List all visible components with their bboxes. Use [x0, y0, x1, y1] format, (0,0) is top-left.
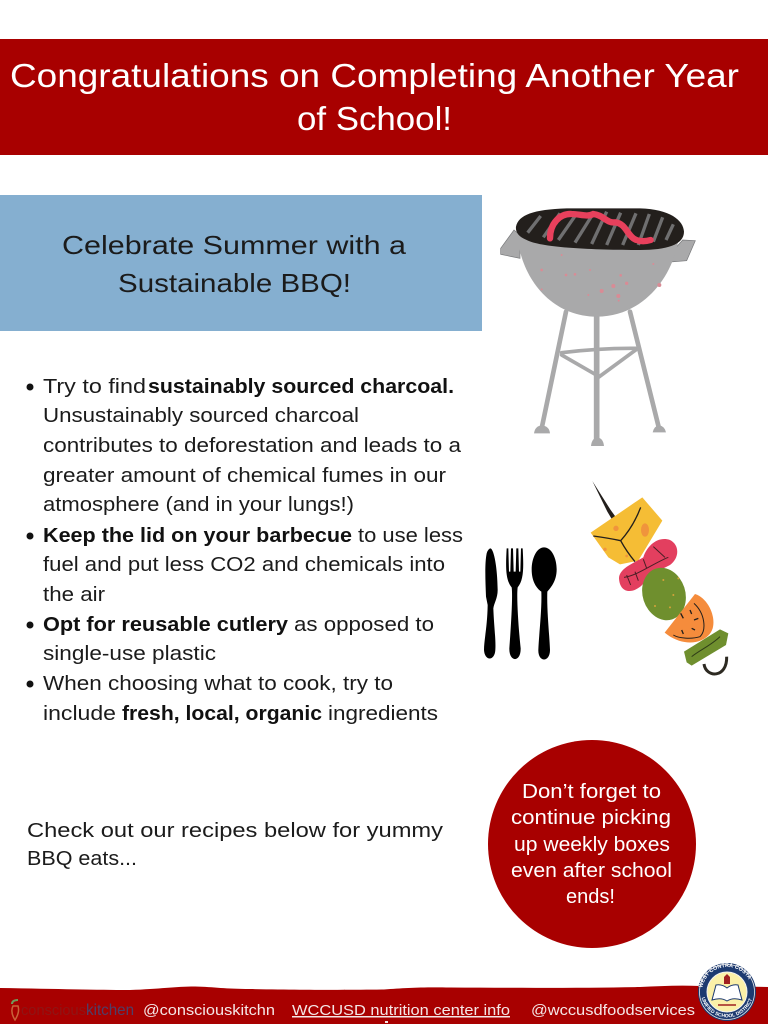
- bullet list: Opt for reusable cutlery: [43, 614, 289, 636]
- bullet list: Unsustainably sourced charcoal: [43, 405, 359, 427]
- bullet list: as opposed to: [294, 614, 434, 636]
- logo: conscious kitchen: conscious: [21, 1002, 86, 1019]
- bullet list: [26, 376, 463, 725]
- footer bar: [0, 986, 768, 1024]
- callout: weekly boxes: up weekly boxes: [514, 834, 670, 856]
- callout: weekly boxes: even after school: [511, 860, 672, 882]
- recipes note: [27, 820, 443, 870]
- bullet list: to use less: [358, 525, 463, 547]
- logo: school district seal: UNIFIED SCHOOL DISTRICT: [702, 997, 752, 1018]
- panel: BBQ heading: [0, 195, 482, 331]
- bullet list: include: [43, 703, 116, 725]
- bullet list: contributes to deforestation and leads to a: [43, 435, 462, 457]
- icon: cutlery: [484, 547, 557, 659]
- logo: conscious kitchen: kitchen: [86, 1002, 134, 1019]
- bullet list: sustainably sourced charcoal.: [148, 376, 454, 398]
- bullet list: ingredients: [328, 703, 438, 725]
- logo: conscious kitchen: [12, 1000, 134, 1020]
- bullet list: fresh, local, organic: [122, 703, 322, 725]
- footer bar: @wccusdfoodservices: [531, 1002, 695, 1019]
- logo: school district seal: [698, 963, 756, 1021]
- footer bar: @consciouskitchn: [143, 1002, 275, 1019]
- title banner: Congratulations on Completing Another Year: [10, 57, 739, 94]
- bullet list: Try to find: [43, 376, 146, 398]
- recipes note: Check out our recipes below for yummy: [27, 820, 443, 842]
- callout: weekly boxes: Don’t forget to: [522, 781, 661, 803]
- bullet list: atmosphere (and in your lungs!): [43, 494, 354, 516]
- logo: school district seal: WEST CONTRA COSTA: [698, 963, 752, 987]
- panel: BBQ heading: Sustainable BBQ!: [118, 268, 351, 298]
- bullet list: Keep the lid on your barbecue: [43, 525, 352, 547]
- bullet list: the air: [43, 584, 105, 606]
- bullet list: When choosing what to cook, try to: [43, 673, 393, 695]
- recipes note: BBQ eats...: [27, 848, 137, 870]
- bullet list: fuel and put less CO2 and chemicals into: [43, 554, 445, 576]
- title banner: [0, 39, 768, 155]
- callout: weekly boxes: ends!: [566, 886, 615, 908]
- icon: kebab skewer: [591, 481, 728, 674]
- title banner: of School!: [297, 100, 452, 137]
- bullet list: greater amount of chemical fumes in our: [43, 465, 446, 487]
- callout: weekly boxes: [488, 740, 696, 948]
- panel: BBQ heading: Celebrate Summer with a: [62, 230, 407, 260]
- bullet list: single-use plastic: [43, 643, 216, 665]
- icon: grill: [501, 208, 695, 446]
- footer bar: WCCUSD nutrition center info: [292, 1002, 510, 1019]
- callout: weekly boxes: continue picking: [511, 807, 671, 829]
